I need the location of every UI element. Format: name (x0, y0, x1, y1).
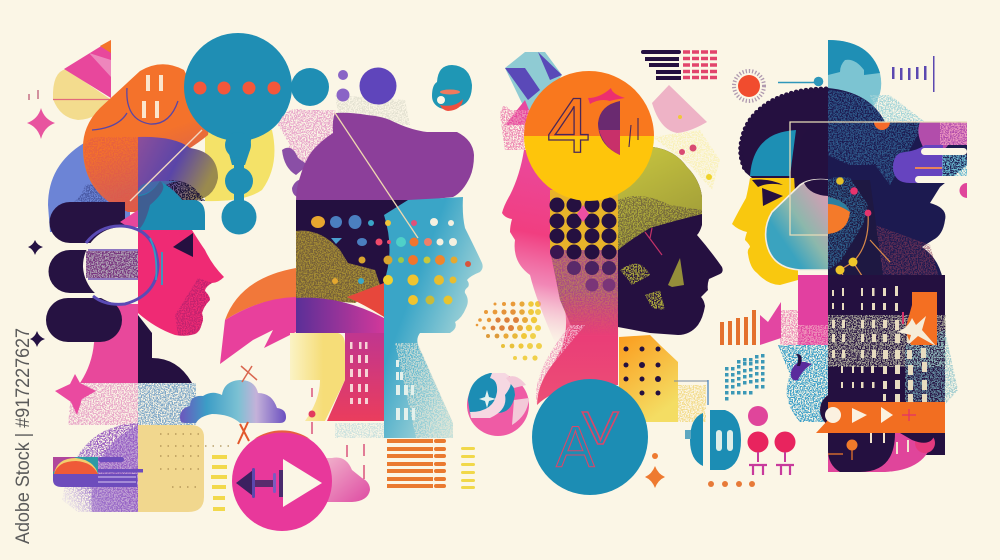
star (55, 374, 96, 415)
eye (752, 180, 783, 206)
sound bars (892, 56, 934, 92)
pink cloud behind head (278, 109, 345, 170)
teal capsule icon (432, 65, 472, 111)
teal cap (750, 130, 796, 176)
pale dots (335, 95, 410, 125)
pink lower neck (537, 290, 618, 405)
left face (502, 150, 600, 345)
pink cloud small (320, 458, 370, 502)
rounded teal panel (766, 180, 828, 270)
yellow dashes (211, 455, 227, 511)
big orange circle: 4 (547, 81, 590, 169)
halftone patch (476, 301, 542, 361)
red wedge (347, 283, 384, 317)
panel: fourth head composition (685, 40, 967, 487)
dots near quarter (678, 115, 712, 180)
bars (142, 75, 163, 118)
sun icon (734, 71, 764, 101)
cream yellow panel (138, 425, 204, 512)
teal half dome (828, 40, 881, 110)
dark brain (296, 200, 408, 298)
purple arc (296, 298, 384, 333)
diagonal line (130, 130, 202, 201)
speech bubble circle (184, 33, 292, 234)
neck dark (138, 315, 192, 383)
orange tag with white bird (897, 292, 937, 346)
purple hat (296, 113, 474, 202)
blue circle with letters (532, 379, 648, 495)
orange lines (387, 439, 446, 488)
stipple squares (68, 383, 196, 425)
dark dots panel (550, 190, 618, 335)
purple gradient block (62, 423, 138, 512)
hex ribbon (505, 52, 562, 125)
hair (739, 88, 828, 270)
neck pink (80, 280, 138, 383)
vertical stock credit: Adobe Stock | #917227627 (12, 328, 34, 544)
outlined rectangle (790, 122, 967, 235)
teal panel bars (396, 360, 415, 420)
lower dark column (828, 275, 945, 455)
neck magenta (798, 275, 828, 345)
yellow stack (461, 447, 475, 489)
column dashes (832, 286, 927, 402)
yellow blob (205, 130, 274, 201)
yellow face (732, 178, 798, 285)
blue circle with letters: A (556, 415, 595, 480)
orange sparkle (645, 453, 665, 488)
yellow haze (652, 130, 720, 190)
pink wedge (120, 210, 138, 232)
round emblem (467, 373, 529, 436)
pink face (138, 230, 224, 336)
dark pills (46, 202, 138, 342)
olive stipple (296, 231, 381, 303)
pale pink haze (500, 106, 530, 150)
center dark (794, 122, 828, 270)
olive hair (618, 147, 702, 250)
mini chart (53, 457, 143, 487)
pink M (760, 302, 781, 345)
olive specks (620, 258, 684, 310)
panel: third head composition (500, 50, 723, 495)
teal D pill (685, 410, 741, 470)
orange half circle (874, 122, 890, 130)
magenta panel (327, 333, 384, 421)
panel: second head composition (220, 95, 665, 489)
red scratch (645, 228, 662, 255)
cloud (180, 380, 286, 423)
panel dots (160, 434, 235, 487)
neuron dots (836, 177, 890, 298)
right dark panel (828, 180, 885, 290)
triangle badge (53, 40, 111, 120)
small top circles (291, 68, 396, 106)
periwinkle blob (48, 140, 130, 232)
navy crown (828, 88, 967, 320)
small orange bars chart (720, 310, 756, 345)
triangle eye (173, 233, 193, 257)
lollipop figures (748, 406, 796, 475)
light blue haze (870, 95, 925, 122)
blue stipple (778, 345, 828, 422)
diagonal line (335, 113, 418, 238)
teal profile (384, 197, 483, 438)
play button (232, 430, 332, 531)
yellow shape (290, 333, 345, 421)
orange dotted panel (619, 335, 708, 422)
teal cap (138, 181, 205, 230)
orange arcs (92, 88, 178, 130)
purple bumps (282, 148, 308, 198)
orange banner (816, 402, 945, 433)
purple and pink cloud (893, 122, 967, 198)
red stipple (875, 225, 945, 310)
sparkle icons (27, 90, 55, 347)
lower blobs (820, 392, 935, 472)
panel bars (350, 342, 368, 404)
big orange circle (524, 71, 654, 201)
right head dark (618, 147, 723, 335)
stipple band (828, 315, 946, 367)
teal pixel grid (725, 354, 764, 400)
pin line (778, 77, 823, 86)
cloud gradient (138, 137, 218, 201)
ring (83, 226, 162, 304)
panel: left head composition (27, 33, 370, 531)
pink quarter (652, 85, 707, 133)
orange dots row (708, 481, 755, 487)
dots (311, 215, 471, 305)
orange and pink arrow (225, 268, 296, 320)
blue circle with letters: V (582, 402, 619, 454)
small marks (308, 388, 364, 479)
stacked bars (641, 50, 718, 80)
cross marks (238, 366, 257, 444)
column haze (905, 330, 958, 410)
pale teal strip (335, 423, 384, 438)
swoosh icon (791, 354, 812, 380)
orange rounded shape (83, 64, 210, 212)
orange half (828, 197, 850, 234)
